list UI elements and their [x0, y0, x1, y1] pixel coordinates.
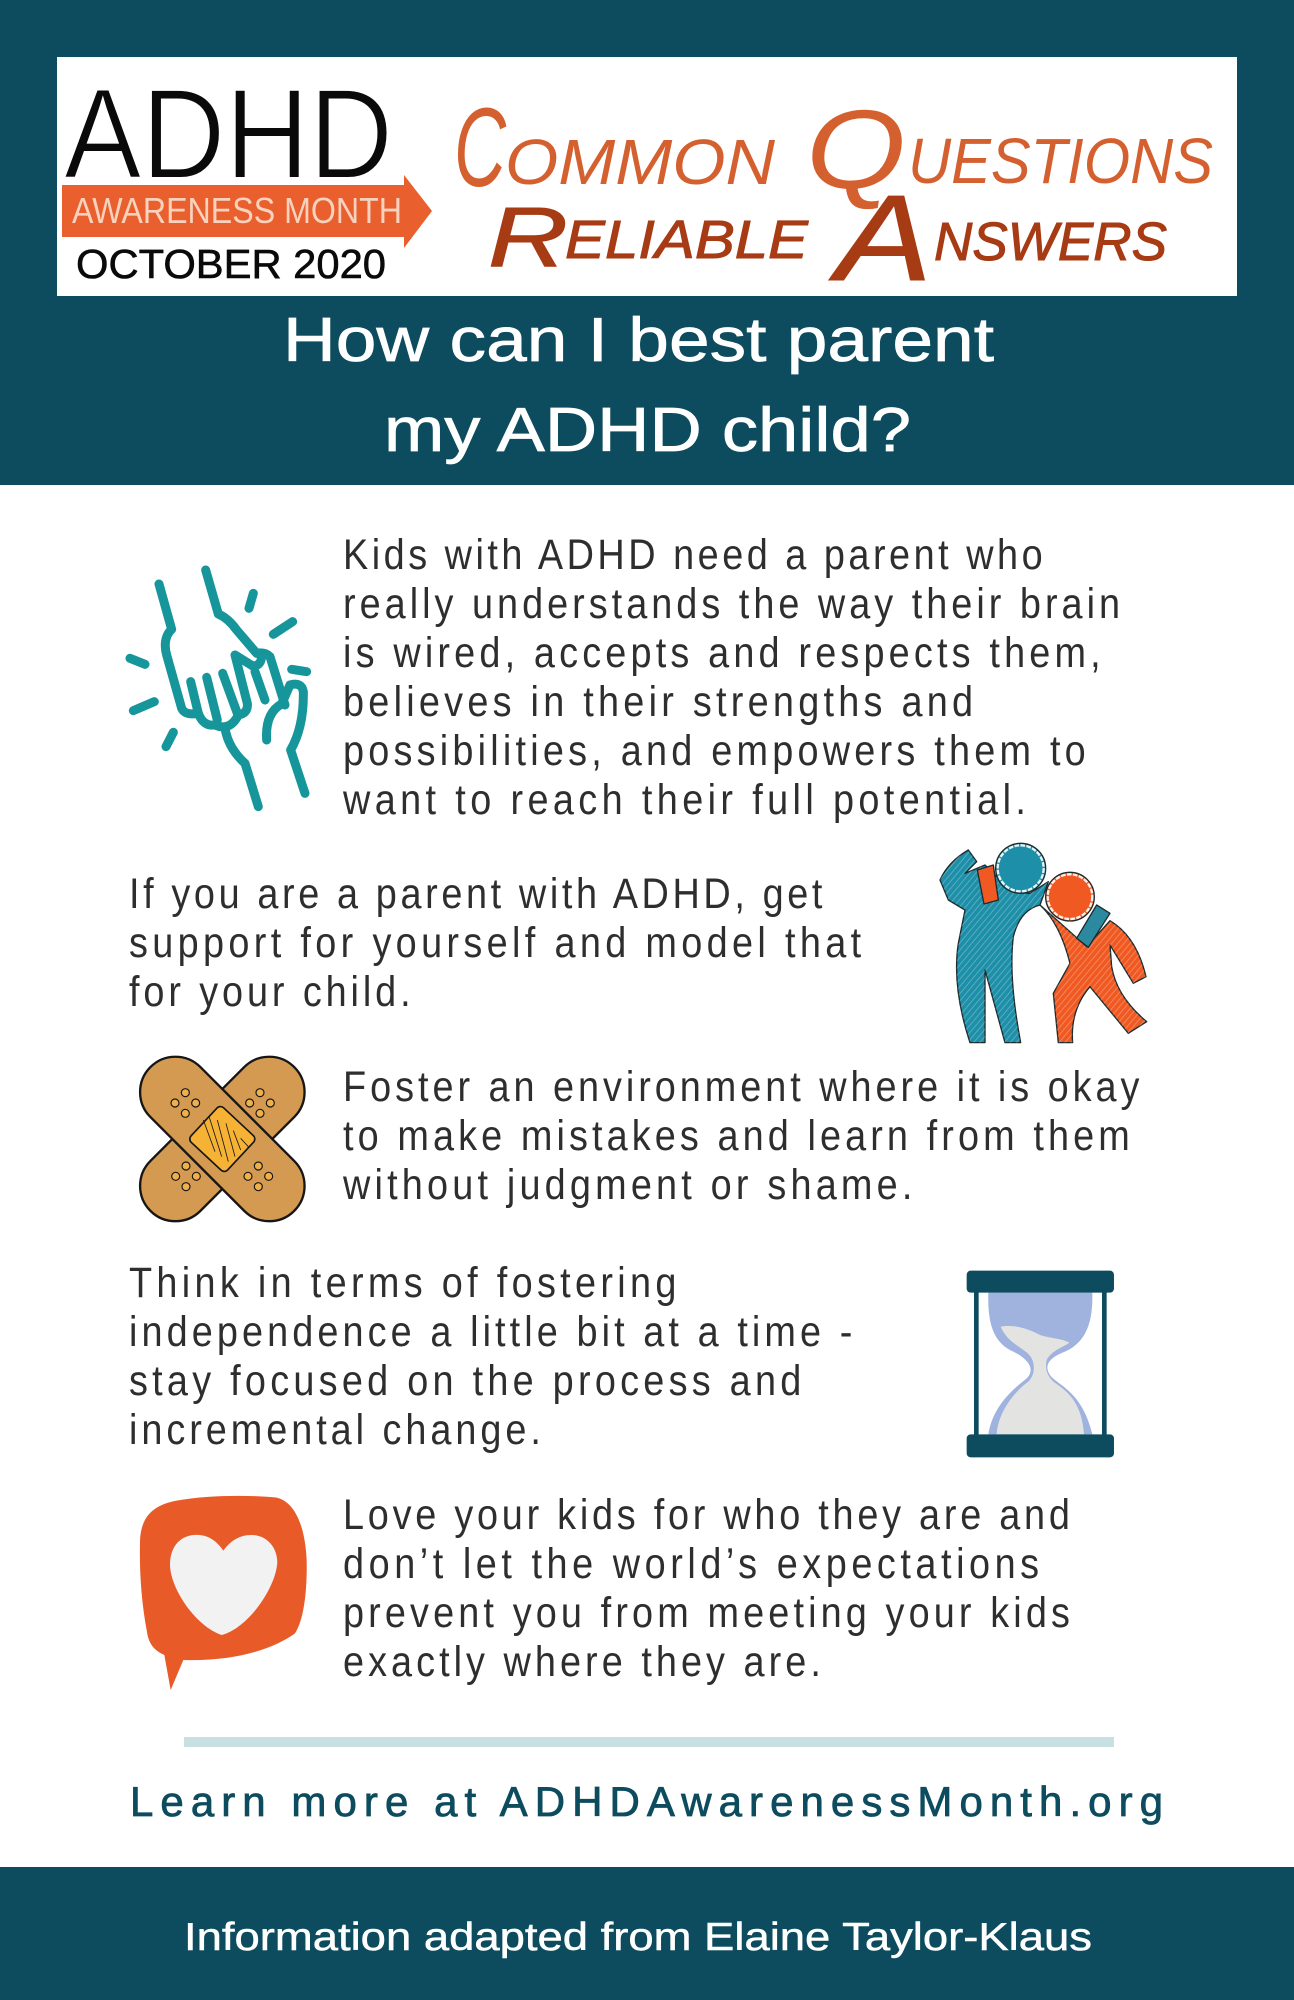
text block: independence — [129, 1258, 852, 1454]
text block: parent support: for your child. — [129, 967, 411, 1016]
call to action link: Learn more at ADHDAwarenessMonth.org — [130, 1778, 1163, 1825]
text block: understanding: want to reach their full potential. — [342, 775, 1026, 824]
logo arrow — [62, 175, 432, 248]
slogan: common questions: OMMON — [505, 126, 776, 198]
text block: understanding — [342, 530, 1120, 824]
text block: independence: independence a little bit at a time - — [129, 1307, 852, 1356]
slogan: reliable answers: ELIABLE — [565, 210, 809, 270]
text block: mistakes: without judgment or shame. — [342, 1160, 912, 1209]
slogan: reliable answers: R — [488, 190, 568, 284]
text block: understanding: Kids with ADHD need a parent who — [343, 530, 1043, 579]
header band — [0, 0, 1294, 485]
text block: understanding: really understands the way their brain — [343, 579, 1120, 628]
text block: independence: stay focused on the process and — [129, 1356, 801, 1405]
text block: independence: Think in terms of fostering — [129, 1258, 676, 1307]
banner: ADHD Awareness Month logo and slogan — [57, 57, 1237, 306]
text block: love — [343, 1490, 1070, 1686]
footer credit: Information adapted from Elaine Taylor-Klaus — [184, 1916, 1092, 1959]
text block: love: exactly where they are. — [343, 1637, 821, 1686]
text block: mistakes: to make mistakes and learn from them — [343, 1111, 1130, 1160]
footer band — [0, 1867, 1294, 2000]
title — [283, 306, 994, 465]
text block: understanding: possibilities, and empowers them to — [343, 726, 1086, 775]
title: my ADHD child? — [384, 396, 911, 465]
slogan: common questions: C — [454, 85, 507, 210]
text block: parent support — [129, 869, 861, 1016]
text block: understanding: is wired, accepts and respects them, — [343, 628, 1101, 677]
text block: love: Love your kids for who they are and — [343, 1490, 1070, 1539]
logo: ADHD: ADHD — [64, 63, 393, 206]
text block: mistakes — [342, 1062, 1140, 1209]
text block: parent support: If you are a parent with ADHD, get — [129, 869, 822, 918]
icon: hourglass — [967, 1271, 1114, 1457]
slogan: reliable answers: A — [828, 170, 932, 306]
logo: awareness month: AWARENESS MONTH — [72, 190, 402, 231]
icon: two figures supporting each other — [940, 843, 1147, 1043]
logo: october 2020: OCTOBER 2020 — [76, 241, 386, 287]
text block: parent support: support for yourself and model that — [129, 918, 861, 967]
icon: holding hands — [130, 570, 307, 807]
slogan: reliable answers: NSWERS — [934, 212, 1167, 272]
icon: crossed bandages — [125, 1042, 319, 1236]
slogan: common questions: UESTIONS — [908, 125, 1213, 197]
title: How can I best parent — [283, 306, 994, 375]
text block: understanding: believes in their strengths and — [343, 677, 973, 726]
text block: mistakes: Foster an environment where it is okay — [343, 1062, 1140, 1111]
text block: independence: incremental change. — [129, 1405, 541, 1454]
slogan: common questions: Q — [806, 87, 906, 212]
text block: love: prevent you from meeting your kids — [343, 1588, 1070, 1637]
icon: heart speech bubble — [140, 1496, 307, 1690]
text block: love: don’t let the world’s expectations — [343, 1539, 1039, 1588]
